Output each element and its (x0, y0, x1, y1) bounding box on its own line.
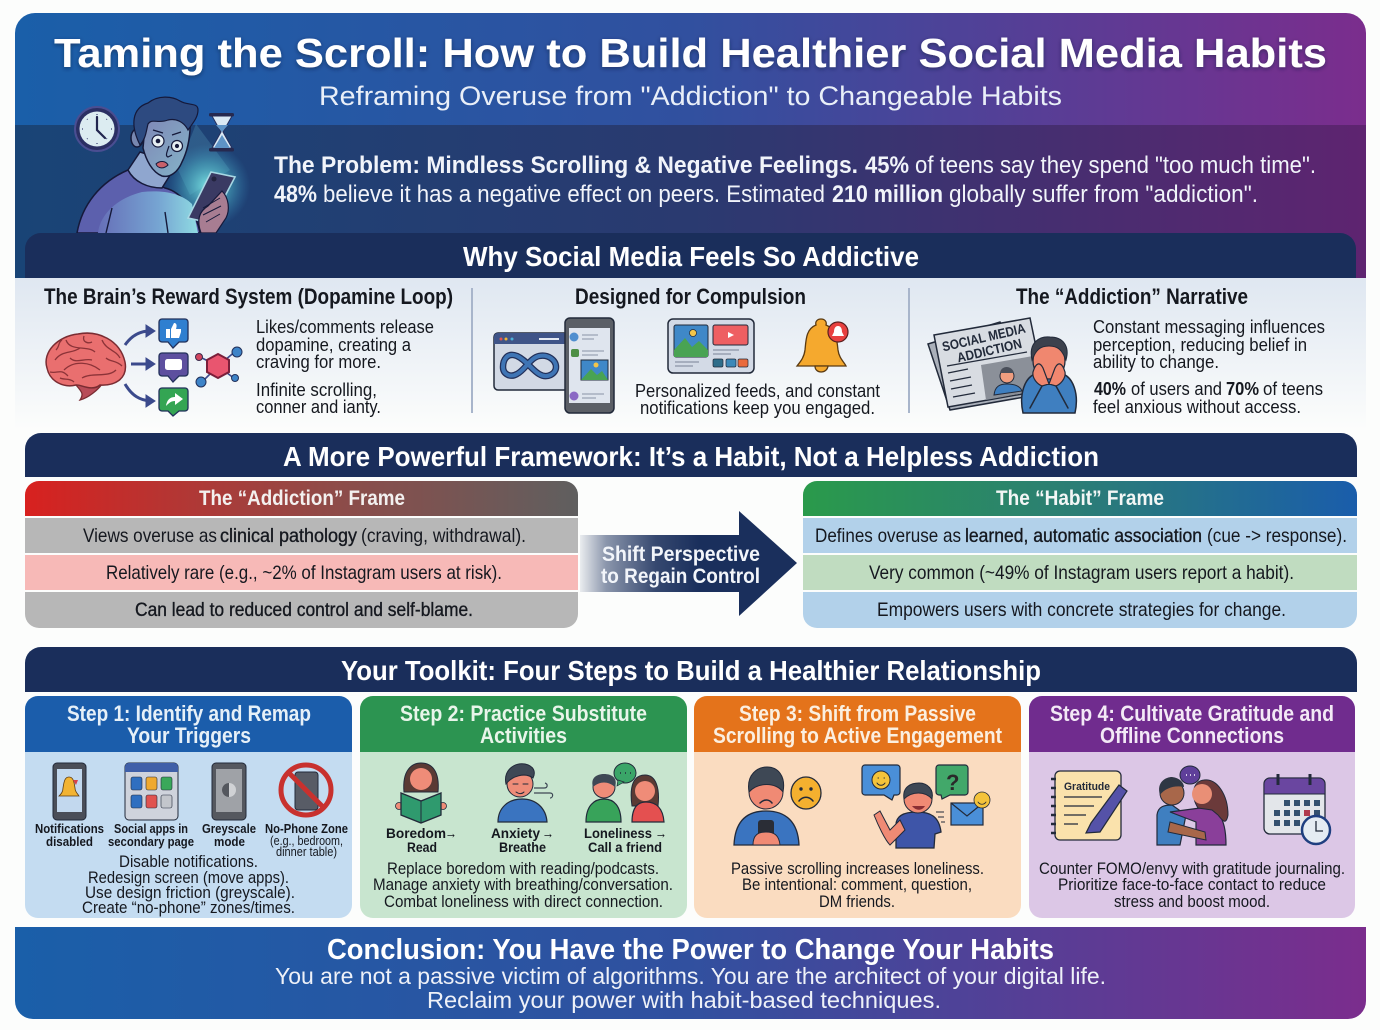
step 2 text (373, 860, 673, 911)
step 1 text (82, 853, 295, 917)
icon: clock (75, 107, 119, 151)
row: relatively rare (25, 555, 578, 590)
icon: brain (46, 333, 125, 400)
icon labels: Read (407, 840, 437, 855)
step 2 text: Replace boredom with reading/podcasts. (387, 860, 659, 878)
step 1 text: Disable notifications. (119, 853, 258, 871)
icon: two people talking (586, 763, 664, 822)
panel: step 4 (1029, 696, 1355, 918)
section heading: framework: A More Powerful Framework: It’s a Habit, Not a Helpless Addiction (283, 441, 1099, 472)
icon labels: disabled (46, 835, 93, 849)
icon: smile bubble (862, 765, 900, 800)
row: empowers: Empowers users with concrete strategies for change. (877, 599, 1286, 621)
icon: phone feed (565, 318, 614, 413)
icon: newspaper: SOCIAL MEDIA (941, 321, 1027, 354)
panel: step 4: Offline Connections (1100, 723, 1284, 748)
problem statement text: believe it has a negative effect on peers. Estimated (323, 181, 825, 208)
row: very common: Very common (~49% of Instagram users report a habit). (869, 562, 1294, 584)
text: narrative: perception, reducing belief in (1093, 334, 1307, 355)
step 4 text (1039, 860, 1345, 911)
icon: media card (668, 319, 754, 373)
panel: step 1: Step 1: Identify and Remap (67, 701, 311, 726)
icon labels: Call a friend (588, 840, 662, 855)
icon: newspaper: ADDICTION (956, 336, 1023, 365)
icon: no phone zone (281, 765, 331, 815)
step 1 text: Redesign screen (move apps). (88, 869, 289, 887)
icon labels: secondary page (108, 835, 194, 849)
icon: share bubble (159, 388, 188, 416)
icon labels: Greyscale (202, 822, 256, 836)
row: very common (803, 555, 1357, 590)
row: clinical pathology: (craving, withdrawal). (361, 525, 526, 547)
icon: newspaper (928, 318, 1045, 410)
text: narrative: of teens (1263, 378, 1323, 399)
step 2 header (360, 696, 687, 752)
icon: person covering face (1022, 337, 1076, 413)
section heading: toolkit (25, 647, 1357, 692)
text: narrative: 70% (1226, 378, 1259, 399)
row: self-blame (25, 592, 578, 628)
icon labels (35, 822, 348, 859)
row: learned association: learned, automatic association (965, 525, 1202, 547)
row: learned association: Defines overuse as (815, 525, 961, 547)
text: narrative: of users and (1131, 378, 1222, 399)
icon: greyscale phone (212, 763, 246, 820)
icon labels: Notifications (35, 822, 104, 836)
arrow: shift perspective: Shift Perspective (602, 543, 760, 566)
problem statement text: 48% (274, 181, 317, 208)
panel: problem band (15, 125, 1366, 278)
conclusion heading: Conclusion: You Have the Power to Change Your Habits (327, 934, 1054, 966)
panel: step 1: Your Triggers (127, 723, 251, 748)
icon: worried man with phone (77, 97, 250, 233)
row: relatively rare: Relatively rare (e.g., ~2% of Instagram users at risk). (106, 562, 502, 584)
text: narrative (1093, 316, 1325, 417)
step 4 text: Counter FOMO/envy with gratitude journaling. (1039, 860, 1345, 878)
icon: question bubble (936, 765, 968, 799)
icon: engaged person (874, 783, 941, 848)
panel: step 2: Step 2: Practice Substitute (400, 701, 647, 726)
step 1 text: Create “no-phone” zones/times. (82, 899, 295, 917)
panel: step 4: Step 4: Cultivate Gratitude and (1050, 701, 1334, 726)
problem statement text: 45% (865, 152, 909, 179)
step 4 header (1029, 696, 1355, 752)
step 4 text: Prioritize face-to-face contact to reduce (1058, 876, 1326, 894)
panel: page header (15, 13, 1366, 278)
icon: calendar with clock (1264, 774, 1330, 844)
step 3 text (731, 860, 984, 911)
panel: addiction frame (25, 481, 578, 628)
text: dopamine: dopamine, creating a (256, 334, 412, 355)
text: narrative: 40% (1094, 378, 1126, 399)
row: learned association: (cue -> response). (1207, 525, 1347, 547)
row: empowers (803, 592, 1357, 628)
step 3 text: DM friends. (819, 893, 895, 911)
row: self-blame: Can lead to reduced control and self-blame. (135, 599, 473, 621)
panel: step 2 (360, 696, 687, 918)
icon: envelope with smile (936, 792, 990, 825)
icon labels: Social apps in (114, 822, 188, 836)
text: dopamine: Likes/comments release (256, 316, 434, 337)
icon: person reading (396, 763, 446, 823)
row: learned association (803, 518, 1357, 553)
row: clinical pathology: clinical pathology (220, 525, 357, 547)
text: dopamine: Infinite scrolling, (256, 379, 377, 400)
conclusion text (275, 963, 1106, 1013)
icon: people hugging (1157, 766, 1228, 845)
frame header (803, 481, 1357, 516)
icon labels: → (542, 825, 554, 842)
panel: step 1 (25, 696, 352, 918)
step 4 text: stress and boost mood. (1114, 893, 1270, 911)
step 3 text: Be intentional: comment, question, (742, 876, 972, 894)
panel: step 3: Step 3: Shift from Passive (739, 701, 976, 726)
icon: three arrows (125, 325, 155, 407)
problem statement text: 210 million (832, 181, 943, 208)
section heading: why addictive (25, 233, 1356, 278)
text: dopamine (256, 316, 434, 417)
subtitle: Reframing Overuse from "Addiction" to Changeable Habits (319, 81, 1062, 111)
text: narrative: ability to change. (1093, 351, 1219, 372)
panel: conclusion (15, 927, 1366, 1019)
row: clinical pathology (25, 518, 578, 553)
icon: secondary page apps (125, 763, 178, 820)
icon labels: → (655, 825, 667, 842)
title: Taming the Scroll: How to Build Healthier Social Media Habits (54, 30, 1327, 76)
icon: infinite scroll browser (494, 333, 568, 390)
row: clinical pathology: Views overuse as (83, 525, 217, 547)
icon: like bubble (159, 319, 188, 348)
arrow: shift perspective: to Regain Control (601, 565, 760, 588)
panel: step 3 (694, 696, 1021, 918)
panel: habit frame: The “Habit” Frame (996, 487, 1164, 510)
problem statement text: of teens say they spend "too much time". (915, 152, 1316, 179)
conclusion text: Reclaim your power with habit-based techniques. (427, 987, 941, 1013)
text: dopamine: conner and ianty. (256, 396, 381, 417)
section heading: toolkit: Your Toolkit: Four Steps to Build a Healthier Relationship (341, 655, 1041, 686)
icon labels: Breathe (499, 840, 546, 855)
icon labels: Anxiety (491, 826, 540, 841)
icon labels: mode (214, 835, 245, 849)
panel: step 2: Activities (480, 723, 567, 748)
problem statement text: The Problem: Mindless Scrolling & Negative Feelings. (274, 152, 858, 179)
conclusion text: You are not a passive victim of algorithms. You are the architect of your digital life. (275, 963, 1106, 989)
panel: why addictive content (15, 278, 1366, 430)
problem statement text: globally suffer from "addiction". (949, 181, 1258, 208)
step 3 header (694, 696, 1021, 752)
icon labels: dinner table) (276, 845, 337, 859)
heading: narrative: The “Addiction” Narrative (1016, 284, 1248, 309)
step 1 text: Use design friction (greyscale). (85, 884, 295, 902)
heading: dopamine loop: The Brain’s Reward System (Dopamine Loop) (44, 284, 453, 309)
text: dopamine: craving for more. (256, 351, 381, 372)
icon labels: Loneliness (584, 826, 652, 841)
icon: dopamine molecule (196, 347, 242, 387)
icon labels: → (445, 825, 457, 842)
frame header (25, 481, 578, 516)
step 2 text: Manage anxiety with breathing/conversation. (373, 876, 673, 894)
icon labels: Boredom (386, 826, 446, 841)
icon labels: No-Phone Zone (265, 822, 348, 836)
icon: gratitude notebook (1051, 771, 1127, 840)
text: narrative: feel anxious without access. (1093, 396, 1301, 417)
icon: question bubble: ? (946, 770, 959, 795)
text: compulsion (635, 380, 880, 418)
icon: gratitude notebook: Gratitude (1064, 781, 1110, 793)
text: compulsion: Personalized feeds, and constant (635, 380, 880, 401)
text: compulsion: notifications keep you engaged. (640, 397, 875, 418)
icon: comment bubble (159, 353, 188, 382)
panel: addiction frame: The “Addiction” Frame (199, 487, 405, 510)
icon: passive phone user (734, 767, 799, 845)
text: narrative: Constant messaging influences (1093, 316, 1325, 337)
section heading: why addictive: Why Social Media Feels So Addictive (463, 241, 919, 272)
problem statement text (274, 152, 1316, 208)
step 1 header (25, 696, 352, 752)
step 3 text: Passive scrolling increases loneliness. (731, 860, 984, 878)
section heading: framework (25, 433, 1357, 477)
panel: habit frame (803, 481, 1357, 628)
panel: step 3: Scrolling to Active Engagement (713, 723, 1003, 748)
icon labels (386, 825, 667, 855)
icon: notification bell (797, 319, 848, 372)
step 2 text: Combat loneliness with direct connection. (384, 893, 663, 911)
arrow: shift perspective (580, 511, 797, 616)
icon: person breathing (498, 764, 553, 822)
icon labels: (e.g., bedroom, (270, 834, 343, 848)
heading: compulsion: Designed for Compulsion (575, 284, 806, 309)
icon: phone with bell (53, 763, 86, 820)
icon: hourglass (209, 113, 234, 152)
icon: sad face (791, 777, 821, 809)
